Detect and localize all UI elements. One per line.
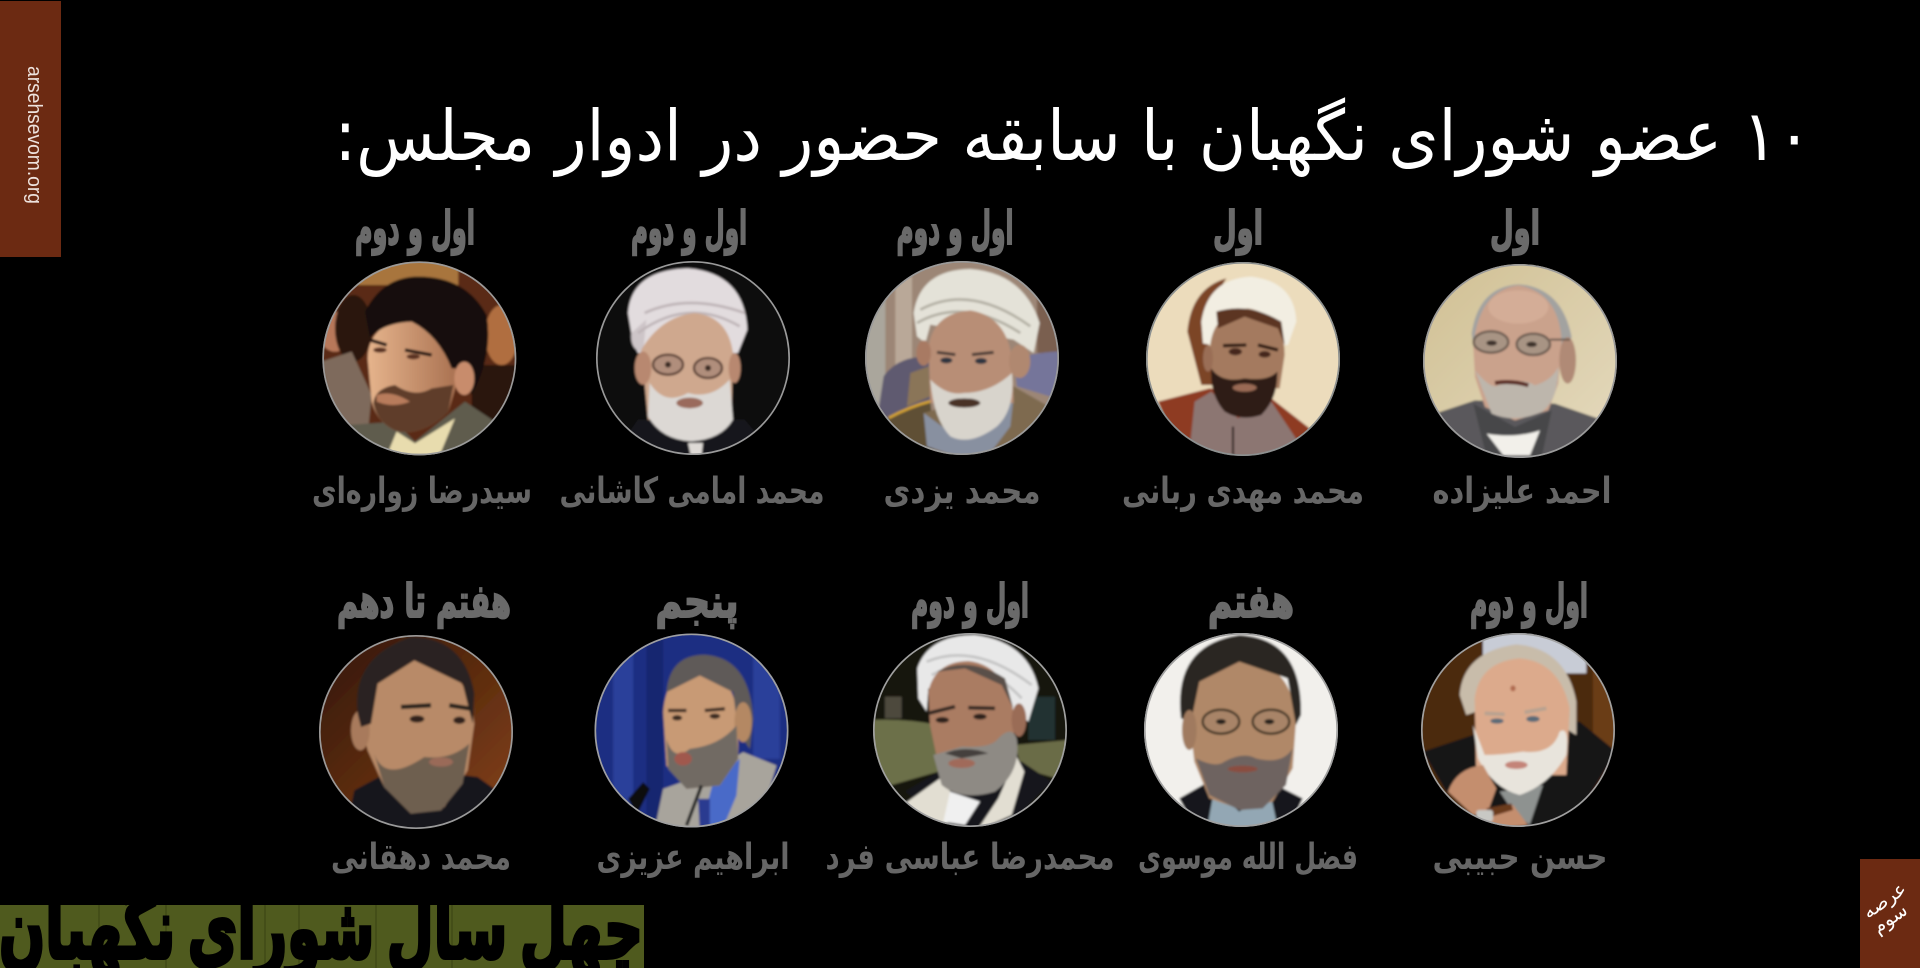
name: mousavi: فضل الله موسوی <box>1138 837 1358 878</box>
name: azizi: ابراهیم عزیزی <box>596 837 790 878</box>
name: habibi: حسن حبیبی <box>1432 837 1608 878</box>
term label: yazdi: اول و دوم <box>896 201 1014 255</box>
portrait: mohammad dehghani <box>319 635 513 829</box>
term label: abbasi fard: اول و دوم <box>911 574 1029 628</box>
title: ۱۰ عضو شورای نگهبان با سابقه حضور در ادوار مجلس: <box>334 95 1812 178</box>
portrait: fazlollah mousavi <box>1144 633 1338 827</box>
name: dehghani: محمد دهقانی <box>331 837 511 878</box>
portrait: ebrahim azizi <box>594 634 788 828</box>
term label: alizadeh: اول <box>1490 201 1540 255</box>
term label: dehghani: هفتم تا دهم <box>337 574 511 628</box>
panel: second row of members <box>311 574 1623 878</box>
bottom banner <box>0 905 644 968</box>
side tab: website <box>0 1 61 257</box>
term label: rabbani: اول <box>1213 201 1263 255</box>
term label: habibi: اول و دوم <box>1470 574 1588 628</box>
portrait: seyed reza zavarei <box>322 261 516 456</box>
name: alizadeh: احمد علیزاده <box>1432 471 1612 512</box>
name: zavarei: سیدرضا زواره‌ای <box>312 471 532 512</box>
portrait: hassan habibi <box>1421 633 1615 827</box>
side tab: website: arsehsevom.org <box>23 66 45 204</box>
portrait: mohammad mehdi rabbani <box>1146 262 1340 456</box>
portrait: mohammadreza abbasi fard <box>873 633 1067 827</box>
logo tab: سوم <box>1868 899 1912 938</box>
name: abbasi fard: محمدرضا عباسی فرد <box>826 837 1114 878</box>
logo tab: عرصه <box>1859 878 1911 923</box>
portrait: mohammad yazdi <box>865 261 1059 455</box>
name: yazdi: محمد یزدی <box>884 471 1040 512</box>
name: emami kashani: محمد امامی کاشانی <box>560 471 824 512</box>
term label: emami kashani: اول و دوم <box>631 201 747 255</box>
logo tab <box>1858 859 1920 968</box>
portrait: mohammad emami kashani <box>596 261 790 455</box>
portrait: ahmad alizadeh <box>1423 264 1617 458</box>
term label: zavarei: اول و دوم <box>355 201 475 255</box>
name: rabbani: محمد مهدی ربانی <box>1122 471 1364 512</box>
panel: first row of members <box>312 201 1625 512</box>
term label: azizi: پنجم <box>656 574 738 629</box>
term label: mousavi: هفتم <box>1208 574 1294 628</box>
